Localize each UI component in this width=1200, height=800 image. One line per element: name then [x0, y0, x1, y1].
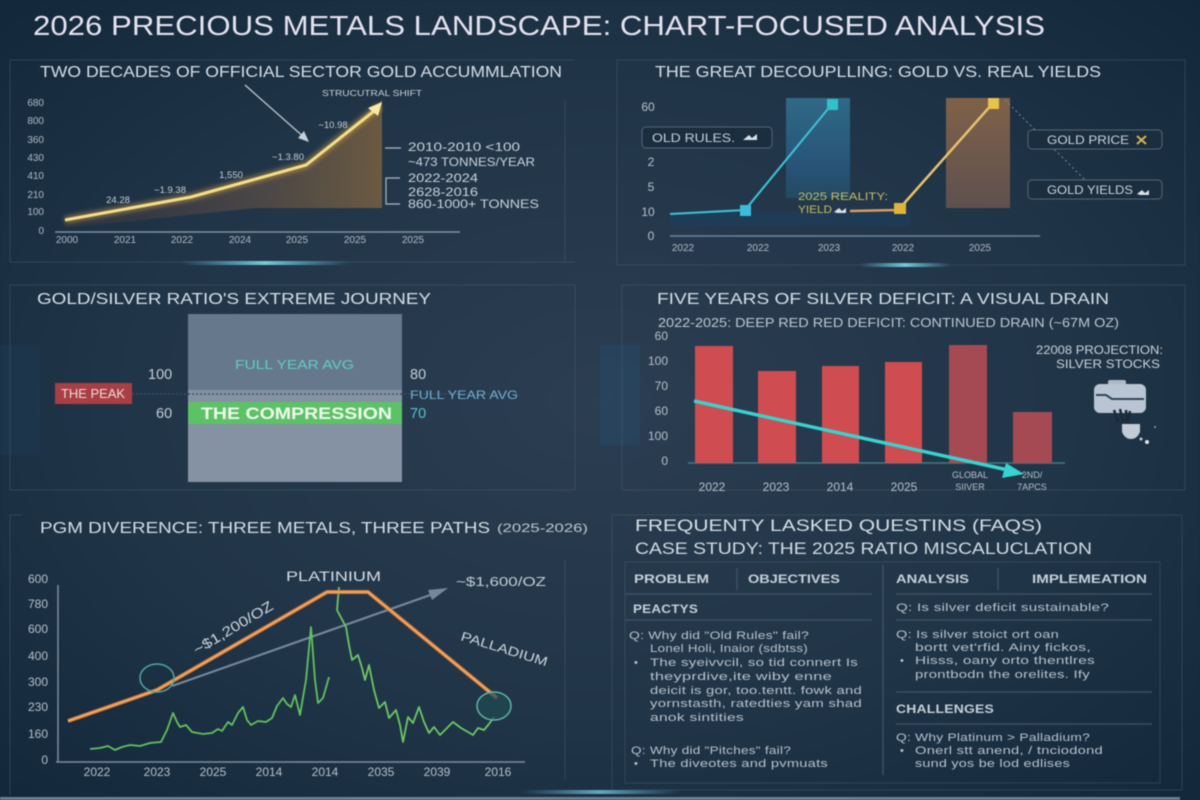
- axis values: ratio: 80: [410, 367, 426, 383]
- heading: pgm divergence: [40, 520, 588, 537]
- line chart: gold vs yields: 2023: [818, 243, 841, 254]
- bar chart: silver deficit: [648, 329, 1065, 494]
- bar chart: silver deficit: 60: [655, 329, 668, 343]
- line chart: pgm prices: 2035: [368, 765, 395, 779]
- line chart: pgm prices: 2016: [485, 765, 512, 779]
- line chart: pgm prices: 0: [41, 753, 48, 767]
- bar chart: silver deficit: 7APCS: [1017, 482, 1047, 492]
- bar chart: silver deficit: GLOBAL: [952, 470, 988, 480]
- arrow: structural shift: [245, 85, 309, 142]
- line chart: pgm prices: 400: [28, 649, 48, 663]
- line chart: gold accumulation: 800: [27, 116, 44, 127]
- axis values: ratio: FULL YEAR AVG: [410, 388, 518, 402]
- panel: faqs and case study: [612, 515, 1182, 790]
- label: projection: 22008 PROJECTION:: [1036, 345, 1163, 357]
- label: the compression: THE COMPRESSION: [201, 404, 392, 423]
- text block: left faq column: anok sintities: [650, 712, 744, 724]
- bar chart: silver deficit: 2025: [891, 480, 918, 494]
- axis values: ratio: 100: [148, 367, 172, 383]
- bar chart: silver deficit: 0: [661, 454, 668, 468]
- line chart: pgm prices: 600: [28, 622, 48, 636]
- axis values: ratio: 60: [156, 406, 172, 422]
- line chart: pgm prices: 300: [28, 675, 48, 689]
- heading: gold accumulation: TWO DECADES OF OFFICIAL SECTOR GOLD ACCUMMLATION: [40, 64, 562, 81]
- line chart: gold accumulation: 24.28: [106, 195, 130, 206]
- label: projection: SILVER STOCKS: [1056, 359, 1160, 371]
- text block: right faq column: Onerl stt anend, / tnciodond: [915, 745, 1103, 757]
- text block: right faq column: CHALLENGES: [896, 702, 994, 716]
- line chart: gold accumulation: ~1.9.38: [154, 185, 186, 196]
- line chart: gold accumulation: 1,550: [219, 170, 243, 181]
- legend: gold price: [1005, 100, 1162, 190]
- text block: left faq column: [629, 602, 862, 770]
- panel: silver deficit: [622, 285, 1185, 494]
- line chart: pgm prices: 2022: [84, 765, 111, 779]
- line chart: gold accumulation: 360: [27, 135, 44, 146]
- table headers: [634, 572, 1147, 586]
- bar chart: silver deficit: 2022: [699, 480, 726, 494]
- table headers: PROBLEM: [634, 572, 709, 586]
- label: 2025 reality: 2025 REALITY:: [798, 191, 888, 203]
- legend: gold yields: [1028, 180, 1162, 199]
- legend: gold yields: GOLD YIELDS: [1047, 185, 1133, 197]
- line chart: gold accumulation: ~1.3.80: [272, 152, 304, 163]
- text block: right faq column: Q: Why Platinum > Palladium?: [896, 732, 1090, 744]
- label: 1600 per oz: ~$1,600/OZ: [456, 574, 546, 589]
- heading: gold silver ratio: GOLD/SILVER RATIO'S EXTREME JOURNEY: [37, 291, 431, 308]
- line chart: gold accumulation: 2000: [56, 235, 79, 246]
- line chart: gold vs yields: 2025: [969, 243, 992, 254]
- text block: right faq column: •: [900, 745, 904, 757]
- text block: right faq column: prontbodn the orelites. Ify: [915, 669, 1090, 681]
- heading: great decoupling: THE GREAT DECOUPLLING: GOLD VS. REAL YIELDS: [655, 64, 1101, 81]
- callout: tonnes per year: 2628-2016: [408, 185, 478, 199]
- label: the peak: THE PEAK: [61, 387, 126, 401]
- table headers: OBJECTIVES: [748, 572, 840, 586]
- text block: left faq column: •: [634, 758, 638, 770]
- panel: great decoupling: [617, 60, 1185, 267]
- text block: left faq column: deicit is gor, too.tentt. fowk and: [650, 685, 862, 697]
- arrow: drain: [694, 401, 1024, 478]
- label: platinum: PLATINIUM: [286, 568, 381, 584]
- text block: right faq column: Hisss, oany orto thentlres: [915, 655, 1095, 667]
- line chart: gold accumulation: 680: [27, 98, 44, 109]
- text block: right faq column: •: [900, 655, 904, 667]
- text block: left faq column: Lonel Holi, Inaior (sdbtss): [650, 643, 808, 655]
- heading: silver deficit: FIVE YEARS OF SILVER DEFICIT: A VISUAL DRAIN: [657, 291, 1109, 308]
- chart: ratio band: [132, 314, 520, 482]
- bar chart: silver deficit: 2014: [827, 480, 854, 494]
- bar chart: silver deficit: 70: [655, 379, 668, 393]
- line chart: pgm prices: 780: [28, 597, 48, 611]
- line chart: pgm prices: 2014: [312, 765, 339, 779]
- line chart: gold accumulation: 2025: [344, 235, 367, 246]
- line chart: gold accumulation: 2025: [286, 235, 309, 246]
- label: palladium: PALLADIUM: [459, 629, 550, 669]
- line chart: gold vs yields: [641, 98, 1040, 254]
- line chart: pgm prices: 2025: [200, 765, 227, 779]
- line chart: gold vs yields: 2022: [747, 243, 770, 254]
- panel: pgm divergence: [10, 515, 680, 795]
- line chart: gold vs yields: 60: [641, 100, 655, 114]
- line chart: gold accumulation: 2024: [229, 235, 252, 246]
- icon: silver stocks: [1094, 380, 1156, 444]
- line chart: gold accumulation: 2021: [114, 235, 137, 246]
- text block: right faq column: bortt vet'rfid. Ainy fickos,: [915, 642, 1091, 654]
- line chart: pgm prices: 600: [28, 572, 48, 586]
- label: full year avg in band: FULL YEAR AVG: [235, 357, 354, 372]
- text block: left faq column: PEACTYS: [633, 602, 698, 616]
- line chart: gold accumulation: 430: [27, 153, 44, 164]
- axis values: ratio: 70: [410, 406, 426, 422]
- panel: official sector gold accumulation: [10, 60, 575, 265]
- line chart: pgm prices: 2039: [424, 765, 451, 779]
- subheading: deep red deficit: 2022-2025: DEEP RED RED DEFICIT: CONTINUED DRAIN (~67M OZ): [658, 315, 1119, 330]
- heading: pgm divergence: PGM DIVERENCE: THREE METALS, THREE PATHS: [40, 520, 490, 537]
- label: old rules: OLD RULES.: [652, 133, 735, 145]
- line chart: gold accumulation: [27, 98, 460, 246]
- label: structural shift: STRUCUTRAL SHIFT: [322, 88, 422, 98]
- line chart: gold accumulation: 210: [27, 190, 44, 201]
- text block: right faq column: sund yos be lod edlises: [915, 758, 1070, 770]
- bar chart: silver deficit: 60: [655, 404, 668, 418]
- callout: tonnes per year: 860-1000+ TONNES: [408, 197, 539, 211]
- line chart: gold accumulation: 410: [27, 171, 44, 182]
- line chart: gold accumulation: 2025: [402, 235, 425, 246]
- legend: gold price: GOLD PRICE: [1047, 135, 1129, 147]
- label: 2025 reality: YIELD: [798, 204, 832, 216]
- table frame: [625, 562, 1160, 783]
- line chart: pgm prices: 2014: [256, 765, 283, 779]
- label: old rules: [642, 127, 772, 148]
- line chart: gold vs yields: 5: [648, 180, 655, 194]
- line chart: gold vs yields: 2022: [672, 243, 695, 254]
- label: the peak: [55, 383, 132, 404]
- bar chart: silver deficit: 2ND/: [1022, 470, 1043, 480]
- callout: tonnes per year: ~473 TONNES/YEAR: [408, 155, 535, 169]
- text block: left faq column: The syeivvcil, so tid connert Is: [650, 657, 858, 669]
- line chart: pgm prices: 2023: [144, 765, 171, 779]
- text block: left faq column: yornstasth, ratedties yam shad: [650, 698, 862, 710]
- title: 2026 PRECIOUS METALS LANDSCAPE: CHART-FOCUSED ANALYSIS: [33, 10, 1045, 41]
- line chart: pgm prices: 160: [28, 727, 48, 741]
- line chart: pgm prices: 230: [28, 700, 48, 714]
- heading: pgm divergence: (2025-2026): [497, 521, 588, 535]
- line chart: gold accumulation: 100: [27, 207, 44, 218]
- line chart: gold vs yields: 0: [648, 229, 655, 243]
- text block: right faq column: Q: Is silver deficit sustainable?: [896, 602, 1109, 614]
- text block: right faq column: Q: Is silver stoict ort oan: [896, 629, 1059, 641]
- bar chart: silver deficit: 2023: [763, 480, 790, 494]
- panel: gold silver ratio: [10, 285, 575, 490]
- line chart: gold accumulation: ~10.98: [318, 120, 348, 131]
- text block: left faq column: theyprdive,ite wiby enne: [650, 671, 832, 683]
- text block: right faq column: [896, 602, 1109, 770]
- text block: left faq column: •: [634, 657, 638, 669]
- callout: tonnes per year: 2010-2010 <100: [408, 140, 520, 154]
- callout: tonnes per year: 2022-2024: [408, 171, 478, 185]
- axis values: ratio: [148, 367, 518, 422]
- heading: case study: CASE STUDY: THE 2025 RATIO MISCALUCLATION: [635, 539, 1092, 558]
- line chart: gold accumulation: 2022: [171, 235, 194, 246]
- heading: faqs: FREQUENTY LASKED QUESTINS (FAQS): [635, 516, 1042, 535]
- line chart: pgm prices: [28, 572, 525, 779]
- text block: left faq column: Q: Why did "Pitches" fail?: [631, 745, 791, 757]
- line chart: gold vs yields: 2022: [892, 243, 915, 254]
- label: 2025 reality: [798, 191, 888, 216]
- line chart: gold vs yields: 2: [648, 155, 655, 169]
- line chart: gold accumulation: 0: [38, 226, 44, 237]
- text block: left faq column: Q: Why did "Old Rules" fail?: [629, 630, 809, 642]
- table headers: ANALYSIS: [896, 572, 969, 586]
- bar chart: silver deficit: SIIVER: [955, 482, 985, 492]
- text block: left faq column: The diveotes and pvmuats: [650, 758, 828, 770]
- label: 1200 per oz: ~$1,200/OZ: [190, 597, 276, 658]
- bar chart: silver deficit: 100: [648, 429, 668, 443]
- bar chart: silver deficit: 100: [648, 354, 668, 368]
- label: projection: [1036, 345, 1163, 371]
- callout: tonnes per year: [385, 140, 539, 211]
- table headers: IMPLEMEATION: [1032, 572, 1147, 586]
- line chart: gold vs yields: 10: [641, 205, 655, 219]
